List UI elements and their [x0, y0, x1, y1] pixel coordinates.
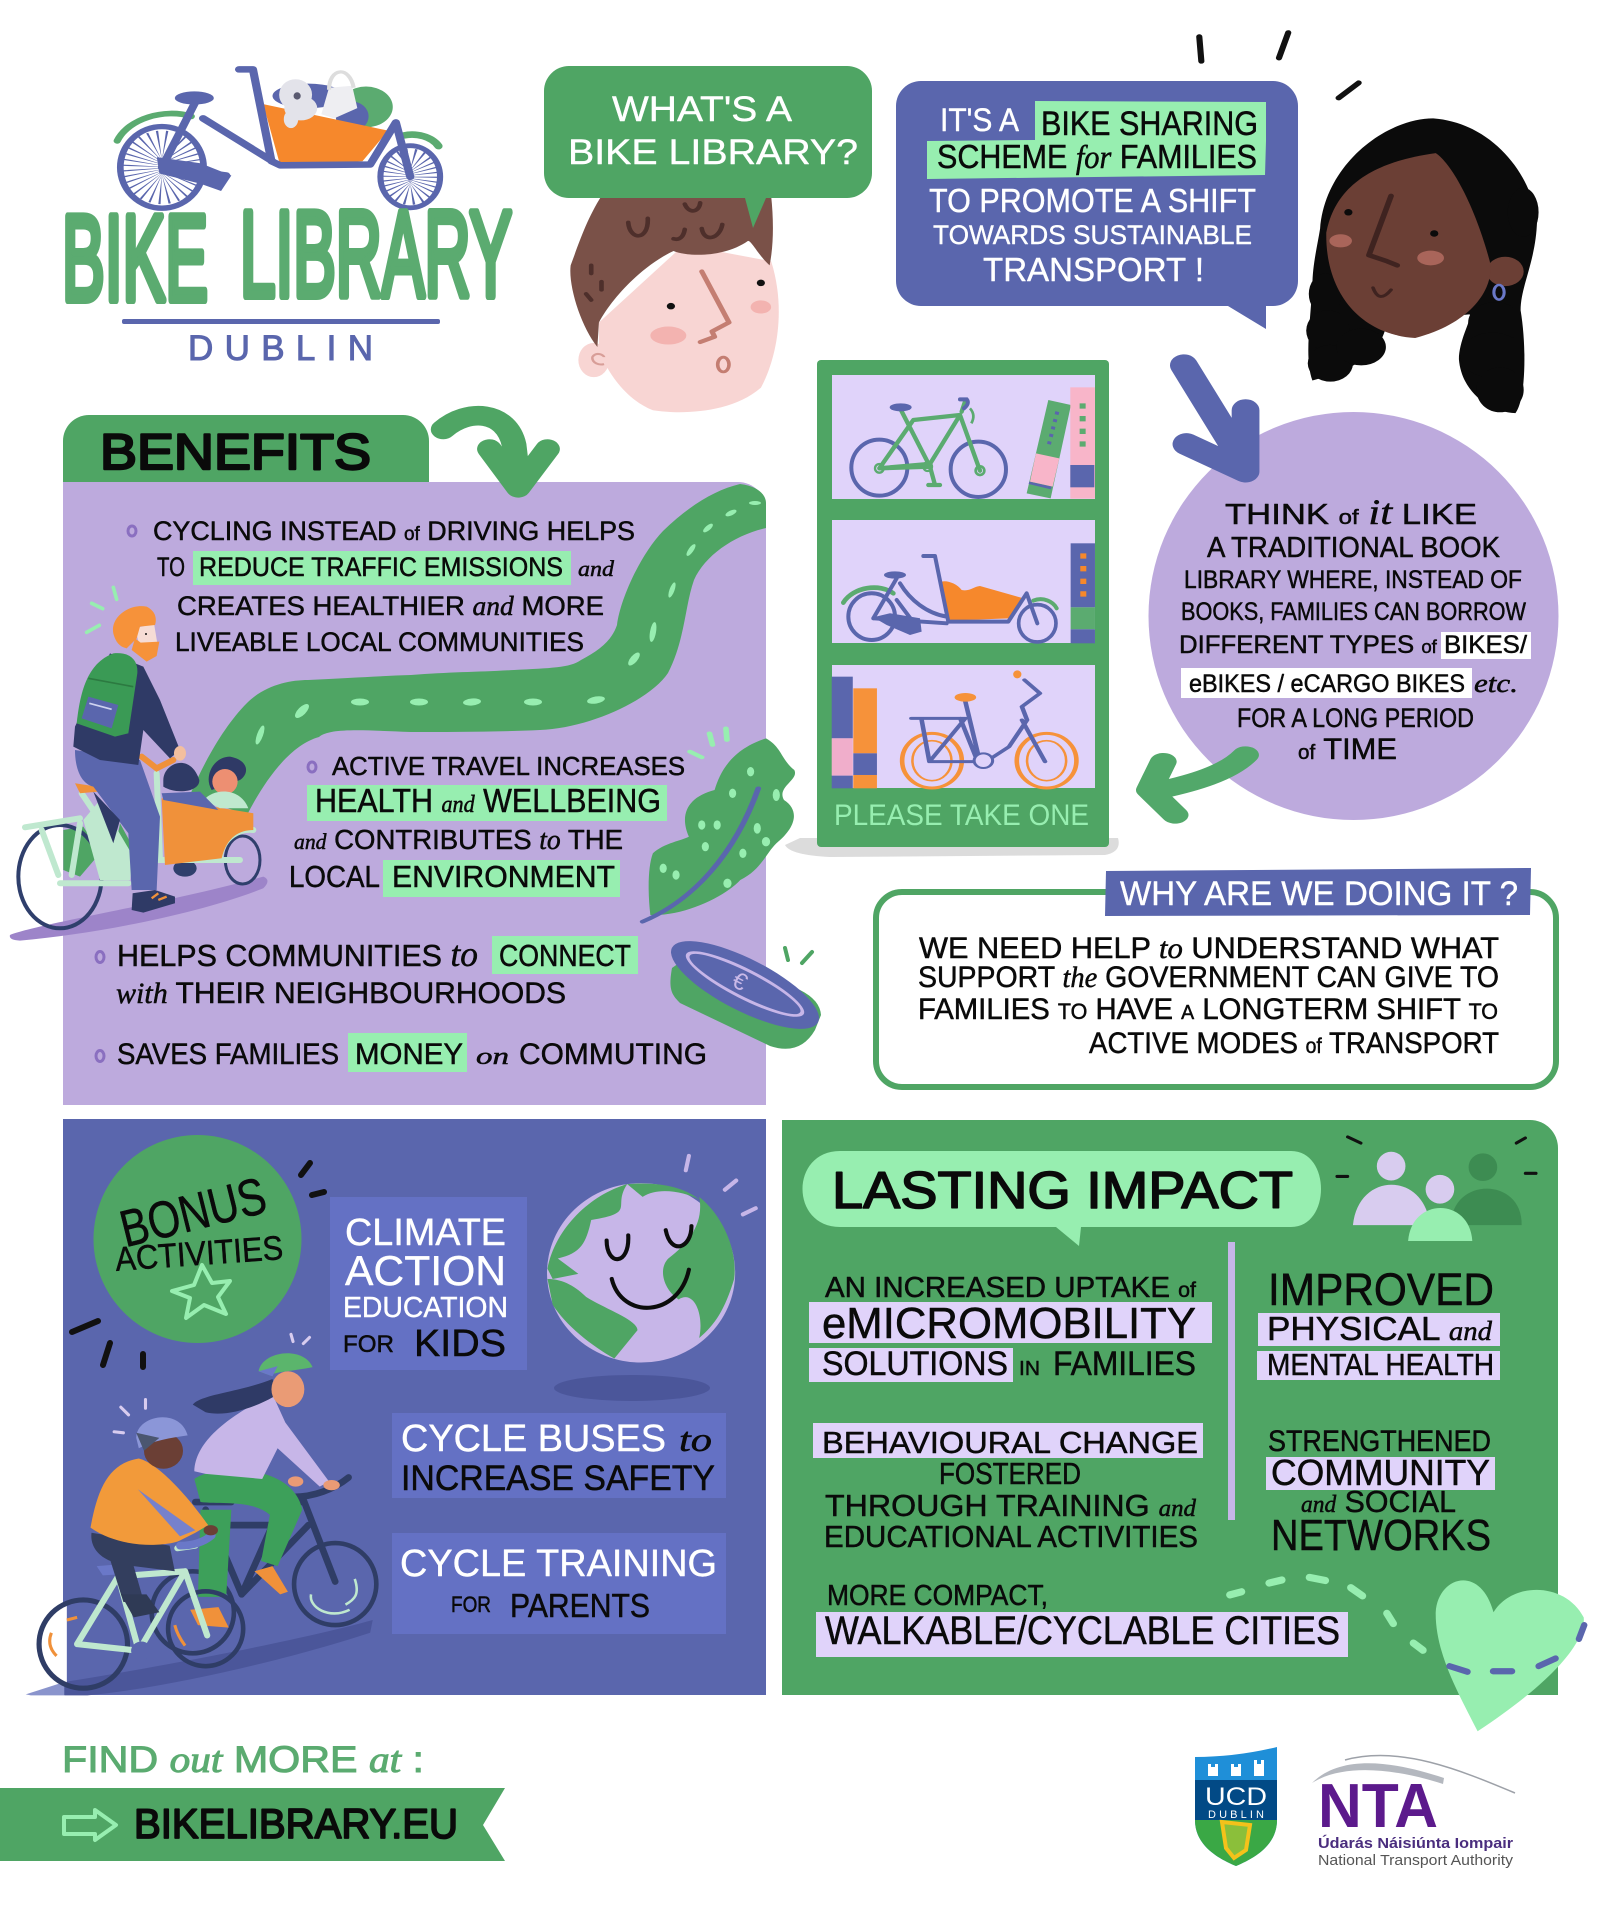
text: right column: [1257, 1264, 1500, 1560]
benefit 3 text: [96, 934, 638, 1010]
circle: think of it like a traditional book library: BOOKS, FAMILIES CAN BORROW: [1181, 598, 1526, 626]
benefit 1 text: LIVEABLE LOCAL COMMUNITIES: [175, 627, 584, 657]
child: [91, 1533, 175, 1602]
badge: bonus activities: ACTIVITIES: [114, 1229, 284, 1279]
icon: heart with dotted trail: [1230, 1577, 1584, 1731]
panel: lasting impact: [782, 1120, 1558, 1695]
heading: WHY ARE WE DOING IT ?: [1120, 875, 1518, 913]
character: girl's head: [1199, 33, 1539, 413]
benefit 4 text: SAVES FAMILIES: [117, 1038, 339, 1071]
emphasis ticks: [1199, 33, 1359, 98]
illustration: parent on cargo bike with children: [10, 587, 267, 941]
text: left column: [809, 1272, 1348, 1657]
benefit 1 text: and: [578, 556, 615, 581]
speech bubble: bike sharing scheme: TOWARDS SUSTAINABLE: [933, 220, 1252, 250]
text: left column: WALKABLE/CYCLABLE CITIES: [825, 1609, 1340, 1653]
speech bubble: bike sharing scheme: BIKE SHARING: [1041, 105, 1258, 143]
text: right column: MENTAL HEALTH: [1267, 1347, 1494, 1382]
box: cycle buses: CYCLE BUSES: [401, 1418, 666, 1460]
illustration: euro coin: €: [728, 967, 752, 997]
illustration: parent and child cycling: [26, 1334, 376, 1695]
box: cycle buses: to: [679, 1422, 712, 1459]
tab heading: [63, 415, 429, 482]
body text: WE NEED HELP to UNDERSTAND WHAT: [919, 932, 1499, 965]
sign: please take one: PLEASE TAKE ONE: [834, 799, 1089, 832]
logo: Bike Library Dublin: [62, 69, 512, 368]
shelf shadow: [785, 838, 1119, 857]
speech bubble: bike sharing scheme: TRANSPORT !: [983, 251, 1204, 288]
divider: [1228, 1242, 1235, 1520]
benefit 2 text: ENVIRONMENT: [392, 859, 615, 894]
speech bubble: bike sharing scheme: SCHEME for FAMILIES: [937, 138, 1257, 176]
circle: think of it like a traditional book library: THINK of it LIKE: [1225, 492, 1477, 532]
text: right column: IMPROVED: [1268, 1264, 1494, 1315]
ribbon: bikelibrary.eu: BIKELIBRARY.EU: [134, 1800, 458, 1847]
box: cycle training: PARENTS: [510, 1587, 650, 1624]
ribbon: bikelibrary.eu: [0, 1788, 505, 1861]
heading bubble: LASTING IMPACT: [832, 1162, 1293, 1220]
children: [162, 757, 248, 810]
box: cycle buses: INCREASE SAFETY: [401, 1459, 715, 1498]
logo: National Transport Authority: NTA: [1318, 1772, 1438, 1841]
cargo box: [162, 798, 253, 865]
torso: [73, 653, 180, 765]
underline: [122, 319, 440, 324]
body text: SUPPORT the GOVERNMENT CAN GIVE TO: [918, 961, 1499, 994]
illustration: euro coin: [660, 925, 830, 1049]
badge: bonus activities: BONUS: [114, 1167, 272, 1259]
body text: FAMILIES TO HAVE A LONGTERM SHIFT TO: [918, 993, 1498, 1026]
benefit 1 text: CREATES HEALTHIER and MORE: [177, 591, 604, 621]
arrow: green to benefits: [443, 416, 548, 488]
benefit 2 text: ACTIVE TRAVEL INCREASES: [332, 751, 685, 781]
shelf 2: [832, 520, 1095, 643]
benefit 1 text: CYCLING INSTEAD of DRIVING HELPS: [153, 516, 635, 546]
benefit 2 text: LOCAL: [289, 859, 380, 894]
box: cycle training: FOR: [451, 1592, 491, 1617]
body text: [918, 932, 1499, 1060]
panel: bonus activities: [63, 1119, 766, 1695]
text: right column: COMMUNITY: [1271, 1452, 1490, 1493]
logo: UCD Dublin: DUBLIN: [1208, 1809, 1264, 1821]
text: right column: STRENGTHENED: [1268, 1425, 1491, 1458]
shelf 3: [832, 665, 1095, 788]
logo: National Transport Authority: [1312, 1755, 1515, 1869]
ground shadow: [10, 877, 267, 941]
benefit 2 text: and CONTRIBUTES to THE: [294, 824, 623, 856]
logo: UCD Dublin: [1195, 1747, 1277, 1866]
benefit 3 text: HELPS COMMUNITIES to: [117, 934, 478, 974]
benefit 1 text: REDUCE TRAFFIC EMISSIONS: [199, 552, 563, 582]
motion ticks: [114, 1334, 309, 1433]
box: climate action education for kids: ACTION: [345, 1247, 506, 1294]
benefit 3 text: with THEIR NEIGHBOURHOODS: [116, 977, 566, 1010]
badge: bonus activities: [72, 1135, 324, 1367]
character: boy's head: [570, 196, 779, 412]
cargo wheel: [225, 836, 260, 884]
speech bubble: what's a bike library: WHAT'S A: [612, 90, 793, 129]
text: left column: eMICROMOBILITY: [822, 1299, 1196, 1348]
box: climate action education for kids: [330, 1197, 527, 1370]
text: find out more: FIND out MORE at :: [62, 1739, 424, 1781]
heading bubble: [802, 1151, 1321, 1246]
box: cycle training: [392, 1533, 726, 1634]
adult rear leg: [198, 1510, 231, 1597]
logo: National Transport Authority: Údarás Náisiúnta Iompair: [1318, 1834, 1513, 1852]
benefit 2 text: [289, 751, 685, 897]
benefit 1 text: TO: [157, 552, 185, 582]
text: right column: PHYSICAL and: [1267, 1310, 1493, 1347]
handlebar: [142, 757, 173, 768]
bike frame: [25, 773, 253, 883]
benefit 4 text: on: [476, 1044, 509, 1070]
text: left column: IN: [1019, 1358, 1040, 1380]
body text: ACTIVE MODES of TRANSPORT: [1089, 1027, 1499, 1060]
circle: think of it like a traditional book library: of TIME: [1298, 733, 1397, 766]
arrow: green to shelf: [1149, 755, 1246, 815]
speech bubble: bike sharing scheme: IT'S A: [940, 102, 1020, 138]
motion ticks: [87, 587, 117, 632]
icon: cargo bike: [117, 69, 440, 208]
backpack: [77, 653, 137, 737]
title: Bike Library: BIKE: [62, 190, 208, 326]
logo: UCD Dublin: UCD: [1205, 1783, 1267, 1811]
box: cycle training: CYCLE TRAINING: [400, 1543, 717, 1585]
shelf 1: [832, 375, 1095, 499]
box: climate action education for kids: KIDS: [414, 1323, 506, 1365]
box: cycle buses: [392, 1413, 726, 1498]
text: left column: MORE COMPACT,: [827, 1580, 1048, 1612]
adult bike: [294, 1543, 376, 1625]
text: right column: and SOCIAL: [1301, 1484, 1456, 1519]
panel: why are we doing it: [876, 868, 1556, 1087]
box: climate action education for kids: FOR: [343, 1331, 394, 1358]
benefit 1 text: [128, 516, 635, 657]
circle: think of it like a traditional book library: etc.: [1474, 669, 1518, 698]
circle: think of it like a traditional book library: LIBRARY WHERE, INSTEAD OF: [1184, 566, 1522, 594]
road: [190, 484, 766, 815]
panel: benefits: [63, 415, 766, 1105]
shoe: [132, 890, 175, 913]
legs: [75, 750, 160, 890]
title: Bike Library: LIBRARY: [240, 186, 512, 322]
circle: think of it like a traditional book library: DIFFERENT TYPES of BIKES/: [1179, 631, 1527, 659]
text: left column: BEHAVIOURAL CHANGE: [822, 1425, 1198, 1460]
benefit 4 text: MONEY: [355, 1038, 463, 1071]
highlights: [927, 101, 1266, 179]
icon: people: [1337, 1137, 1536, 1241]
text: left column: THROUGH TRAINING and: [825, 1488, 1197, 1523]
arm and hand: [174, 746, 186, 761]
text: left column: FOSTERED: [939, 1456, 1081, 1491]
text: Dublin: DUBLIN: [188, 329, 373, 368]
speech bubble: what's a bike library: BIKE LIBRARY?: [568, 133, 858, 172]
box: climate action education for kids: CLIMATE: [345, 1212, 506, 1254]
icon: star: [172, 1265, 230, 1318]
tab heading: BENEFITS: [100, 424, 371, 480]
illustration: leaf: [643, 728, 795, 922]
icon: arrow: [64, 1810, 116, 1840]
text: right column: NETWORKS: [1271, 1511, 1491, 1560]
benefit 2 text: HEALTH and WELLBEING: [315, 782, 661, 819]
head: [135, 623, 157, 647]
ground shadow: [64, 1620, 373, 1695]
text: left column: AN INCREASED UPTAKE of: [825, 1272, 1196, 1304]
benefit 3 text: CONNECT: [499, 938, 631, 973]
text: left column: SOLUTIONS: [822, 1345, 1008, 1383]
text: left column: EDUCATIONAL ACTIVITIES: [824, 1519, 1198, 1554]
icon: smiling earth: [547, 1156, 756, 1401]
box: climate action education for kids: EDUCATION: [343, 1292, 508, 1324]
circle: think of it like a traditional book library: A TRADITIONAL BOOK: [1207, 532, 1501, 564]
benefit 4 text: COMMUTING: [519, 1038, 707, 1071]
text: left column: FAMILIES: [1053, 1345, 1196, 1383]
speech bubble: bike sharing scheme: TO PROMOTE A SHIFT: [929, 182, 1256, 219]
rear wheel: [63, 827, 100, 877]
circle: think of it like a traditional book library: eBIKES / eCARGO BIKES: [1189, 670, 1465, 698]
bookshelf: please take one: [785, 360, 1119, 857]
title: Bike Library: [62, 186, 512, 326]
saddle: [75, 783, 98, 793]
speech bubble: what's a bike library: [544, 66, 872, 228]
speech bubble: bike sharing scheme: [896, 81, 1298, 329]
benefit 4 text: [96, 1033, 707, 1072]
child bike: [38, 1599, 83, 1687]
logo: National Transport Authority: National Transport Authority: [1318, 1853, 1514, 1869]
arrow: blue down to circle: [1184, 365, 1246, 471]
adult: [194, 1470, 302, 1566]
circle: think of it like a traditional book library: FOR A LONG PERIOD: [1237, 703, 1474, 733]
circle: think of it like a traditional book library: [1148, 412, 1558, 820]
